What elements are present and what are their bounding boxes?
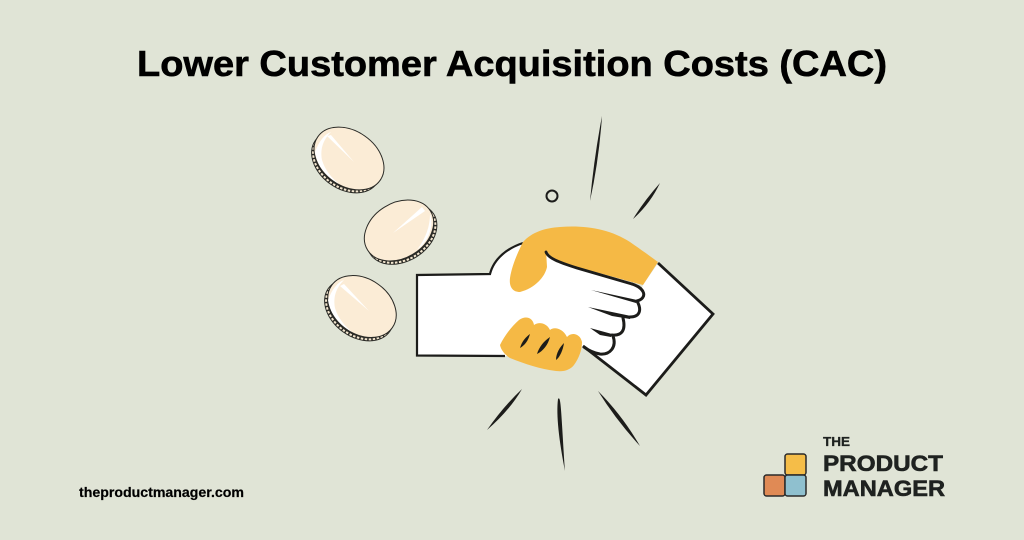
logo wordmark: THE [823,435,850,449]
rays around handshake [487,116,660,471]
title: Lower Customer Acquisition Costs (CAC) [137,43,887,84]
yellow hand finger marks [520,334,530,348]
logo wordmark [823,435,945,501]
logo wordmark: PRODUCT [823,451,944,476]
left sleeve outline [417,243,523,356]
right cuff [583,263,713,395]
icon: coin bottom [312,263,408,354]
yellow upper hand [510,227,658,292]
icon: coin top [299,114,396,206]
website label: theproductmanager.com [79,485,244,500]
logo wordmark: MANAGER [823,476,945,501]
upper hand crease and finger outlines [546,252,644,354]
icon: coin middle [353,188,449,277]
logo squares [764,454,806,496]
left sleeve and hand [417,243,644,356]
small ring [546,190,558,202]
right cuff outline [583,263,713,395]
finger lines [591,290,637,303]
icon: handshake [417,227,713,395]
logo [764,435,945,501]
yellow lower hand [500,318,582,371]
